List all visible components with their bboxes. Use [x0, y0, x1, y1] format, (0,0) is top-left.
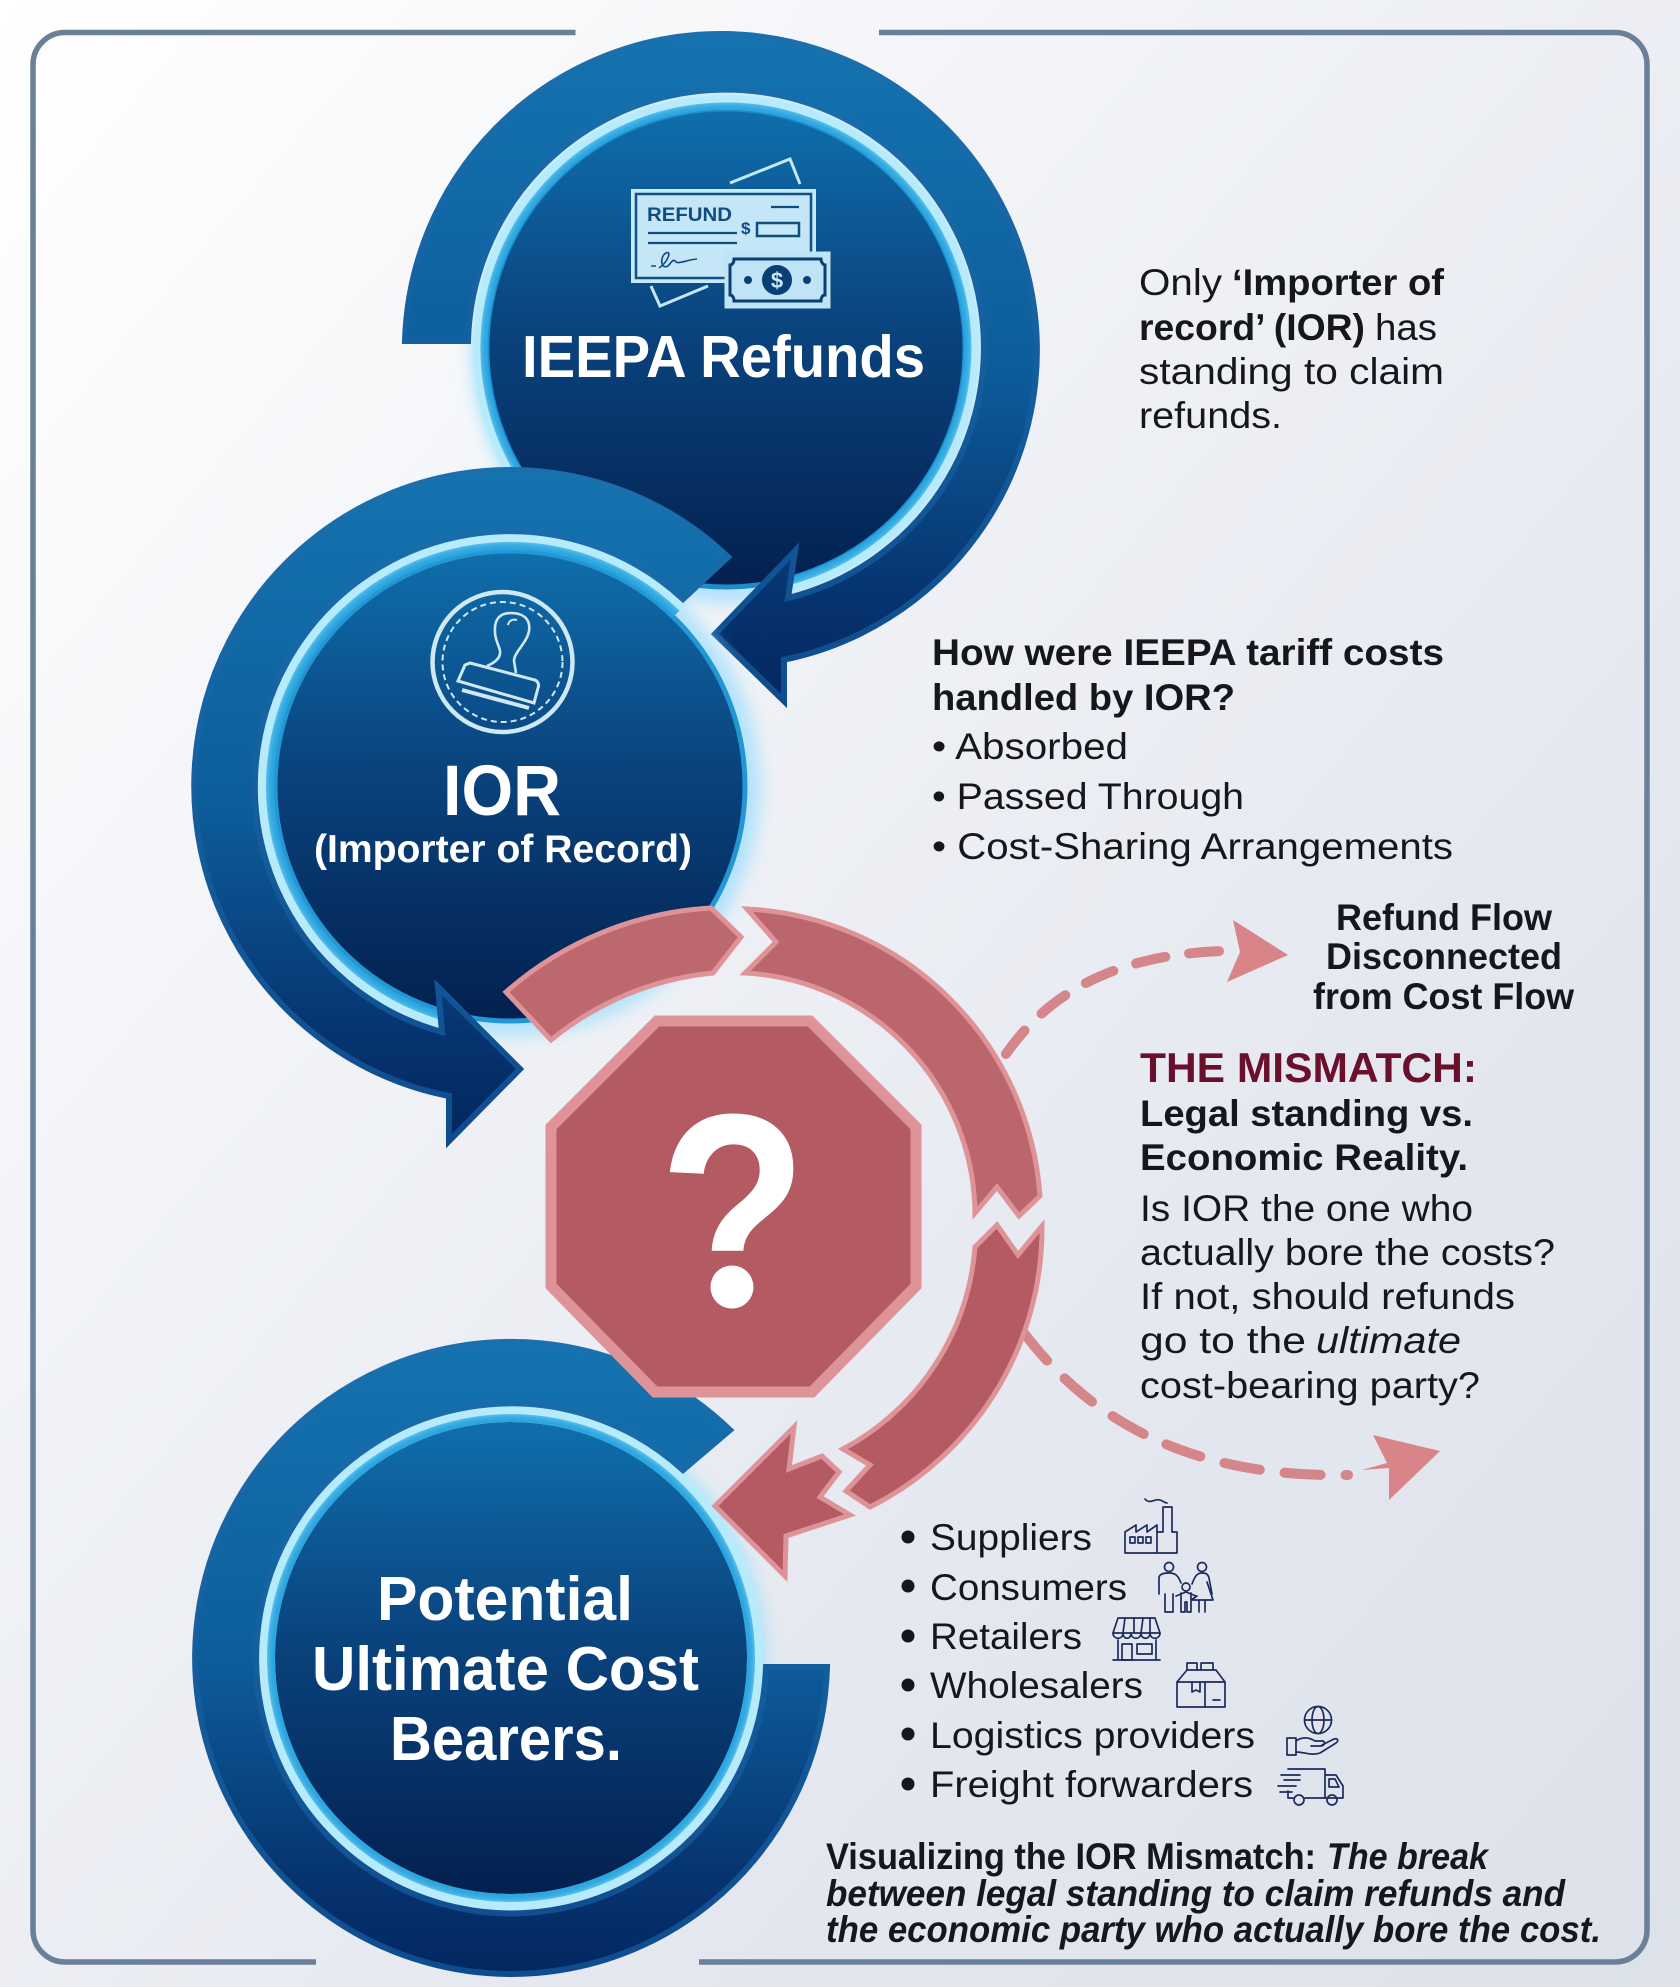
text: the mismatch: If not, should refunds — [1140, 1276, 1515, 1317]
text: how were tariff costs handled — [932, 632, 1453, 867]
stop sign octagon — [551, 1021, 916, 1392]
red arc segment: top right — [745, 909, 1040, 1216]
text: the mismatch: Legal standing vs. — [1140, 1093, 1473, 1134]
arc: bearers ring — [195, 1342, 827, 1974]
icon: refund check and cash: $ — [771, 268, 783, 293]
text: only importer of record: has — [1375, 307, 1437, 348]
icon: truck — [1278, 1769, 1343, 1805]
text: how were tariff costs handled: • Absorbed — [932, 726, 1128, 767]
label: Importer of Record: (Importer of Record) — [314, 828, 692, 871]
text: refund flow disconnected: Refund Flow — [1336, 897, 1552, 938]
text: how were tariff costs handled: • Cost-Sharing Arrangements — [932, 826, 1453, 867]
footer caption: between legal standing to claim refunds and — [826, 1873, 1566, 1914]
text: only importer of record: Only — [1139, 262, 1223, 303]
label: Potential Ultimate Cost Bearers: Potential — [377, 1565, 633, 1634]
red arrow head — [715, 1427, 850, 1576]
list: cost bearers: Freight forwarders — [930, 1764, 1253, 1805]
list: cost bearers: Logistics providers — [930, 1715, 1255, 1756]
mismatch symbol — [506, 908, 1042, 1576]
text: only importer of record: ‘Importer of — [1232, 262, 1445, 303]
circle: IOR — [194, 470, 760, 1141]
text: how were tariff costs handled: • Passed Through — [932, 776, 1244, 817]
icon: boxes — [1177, 1663, 1225, 1707]
text: the mismatch: actually bore the costs? — [1140, 1232, 1555, 1273]
question mark dot — [710, 1266, 754, 1308]
text: only importer of record: record’ (IOR) — [1139, 307, 1365, 348]
text: refund flow disconnected: Disconnected — [1326, 936, 1562, 977]
icon: store — [1113, 1618, 1160, 1660]
circle: IEEPA Refunds — [405, 34, 1037, 701]
list: cost bearers: Consumers — [930, 1567, 1127, 1608]
list: cost bearers — [902, 1499, 1343, 1805]
icon: hand with globe — [1287, 1706, 1338, 1755]
label: Potential Ultimate Cost Bearers: Ultimate Cost — [312, 1635, 699, 1704]
footer caption: Visualizing the IOR Mismatch: — [826, 1836, 1316, 1877]
circle: Potential Ultimate Cost Bearers — [195, 1342, 827, 1974]
label: Potential Ultimate Cost Bearers: Bearers. — [390, 1705, 622, 1774]
text: refund flow disconnected — [1313, 897, 1574, 1017]
footer caption — [826, 1836, 1601, 1950]
footer caption: the economic party who actually bore the cost. — [826, 1909, 1601, 1950]
text: how were tariff costs handled: handled by IOR? — [932, 677, 1235, 718]
icon: stamp seal — [432, 592, 572, 732]
list: cost bearers: Suppliers — [930, 1517, 1092, 1558]
arrow: refund arc — [405, 34, 1037, 701]
icon: refund check and cash: REFUND — [647, 205, 732, 226]
footer caption: The break — [1327, 1836, 1490, 1877]
question mark: ? — [659, 1055, 807, 1369]
text: the mismatch: go to the — [1140, 1320, 1306, 1361]
list: cost bearers: Wholesalers — [930, 1665, 1143, 1706]
arrow: IOR arc — [194, 470, 728, 1141]
text: the mismatch: ultimate — [1316, 1320, 1461, 1361]
text: only importer of record — [1139, 262, 1445, 436]
arrow: dashed refund flow — [1006, 920, 1288, 1054]
text: only importer of record: standing to claim — [1139, 351, 1444, 392]
arrow: dashed cost flow — [1024, 1333, 1440, 1500]
red arc segment: top left — [506, 908, 741, 1040]
icon: refund check and cash — [632, 159, 829, 307]
label: IOR: IOR — [443, 752, 561, 831]
label: Potential Ultimate Cost Bearers — [312, 1565, 699, 1774]
label: IEEPA Refunds: IEEPA Refunds — [522, 324, 925, 390]
red arc segment: lower right — [843, 1225, 1042, 1507]
text: how were tariff costs handled: How were IEEPA tariff costs — [932, 632, 1444, 673]
text: the mismatch: cost-bearing party? — [1140, 1365, 1480, 1406]
heading: the mismatch: THE MISMATCH: — [1140, 1044, 1477, 1091]
text: refund flow disconnected: from Cost Flow — [1313, 976, 1574, 1017]
text: only importer of record: refunds. — [1139, 395, 1282, 436]
list: cost bearers: Retailers — [930, 1616, 1082, 1657]
icon: family — [1159, 1562, 1213, 1612]
text: the mismatch: Economic Reality. — [1140, 1137, 1468, 1178]
icon: refund check and cash: $ — [741, 219, 751, 238]
icon: factory — [1125, 1499, 1177, 1553]
text: the mismatch: Is IOR the one who — [1140, 1188, 1473, 1229]
text: the mismatch — [1140, 1044, 1555, 1406]
